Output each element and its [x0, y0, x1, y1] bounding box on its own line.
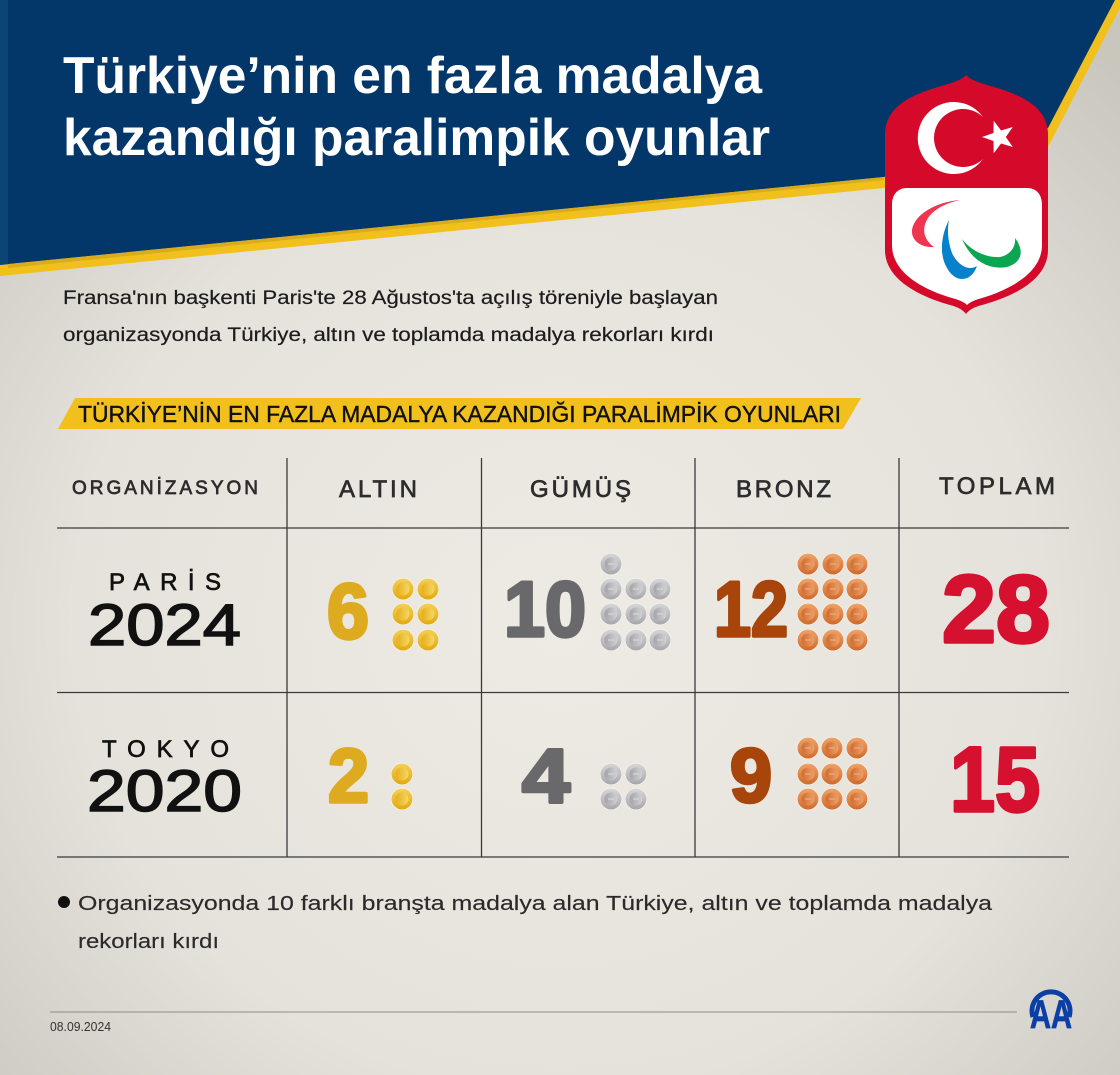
intro text: organizasyonda Türkiye, altın ve toplamda madalya rekorları kırdı [63, 325, 714, 346]
bullet note: Organizasyonda 10 farklı branşta madalya alan Türkiye, altın ve toplamda madalya [78, 893, 993, 915]
title [63, 47, 770, 167]
footer rule [50, 1011, 1017, 1013]
table column headers [72, 473, 1055, 503]
Tokyo total: 15 [950, 729, 1040, 831]
Tokyo silver count: 4 [522, 734, 570, 819]
Tokyo silver medals [600, 763, 647, 810]
Tokyo gold medals [391, 763, 413, 810]
table column headers: ORGANİZASYON [72, 478, 258, 499]
Paris silver medals [600, 553, 671, 651]
row label: Paris 2024: PARİS [109, 569, 221, 596]
Tokyo gold count: 2 [328, 734, 369, 819]
table column headers: TOPLAM [939, 473, 1055, 500]
Tokyo bronze count: 9 [730, 734, 772, 819]
row label: Tokyo 2020 [87, 736, 242, 824]
table column headers: ALTIN [339, 476, 417, 503]
row label: Paris 2024: 2024 [88, 593, 241, 658]
header banner [0, 0, 1120, 276]
table column headers: GÜMÜŞ [530, 476, 631, 503]
table grid [57, 458, 1069, 857]
row label: Tokyo 2020: 2020 [87, 759, 242, 824]
Paris gold medals [392, 578, 439, 651]
table section heading: TÜRKİYE’NİN EN FAZLA MADALYA KAZANDIĞI PARALİMPİK OYUNLARI [78, 401, 841, 427]
intro text: Fransa'nın başkenti Paris'te 28 Ağustos'ta açılış töreniyle başlayan [63, 288, 718, 309]
Paris bronze count: 12 [714, 565, 788, 653]
row label: Tokyo 2020: TOKYO [102, 736, 229, 763]
Paris total: 28 [942, 556, 1050, 663]
bullet note [58, 893, 993, 953]
title: kazandığı paralimpik oyunlar [63, 109, 770, 167]
bullet note: rekorları kırdı [78, 931, 219, 953]
Paris bronze medals [797, 553, 868, 651]
date: 08.09.2024 [50, 1020, 111, 1034]
Paris silver count: 10 [504, 565, 586, 653]
title: Türkiye’nin en fazla madalya [63, 47, 763, 105]
Anadolu Agency logo: AA [1030, 993, 1072, 1037]
emblem: Turkish Paralympic Committee shield [885, 75, 1048, 314]
Tokyo bronze medals [797, 737, 868, 810]
row label: Paris 2024 [88, 569, 241, 658]
table column headers: BRONZ [736, 476, 831, 503]
Paris gold count: 6 [327, 567, 369, 655]
intro text [63, 288, 718, 346]
